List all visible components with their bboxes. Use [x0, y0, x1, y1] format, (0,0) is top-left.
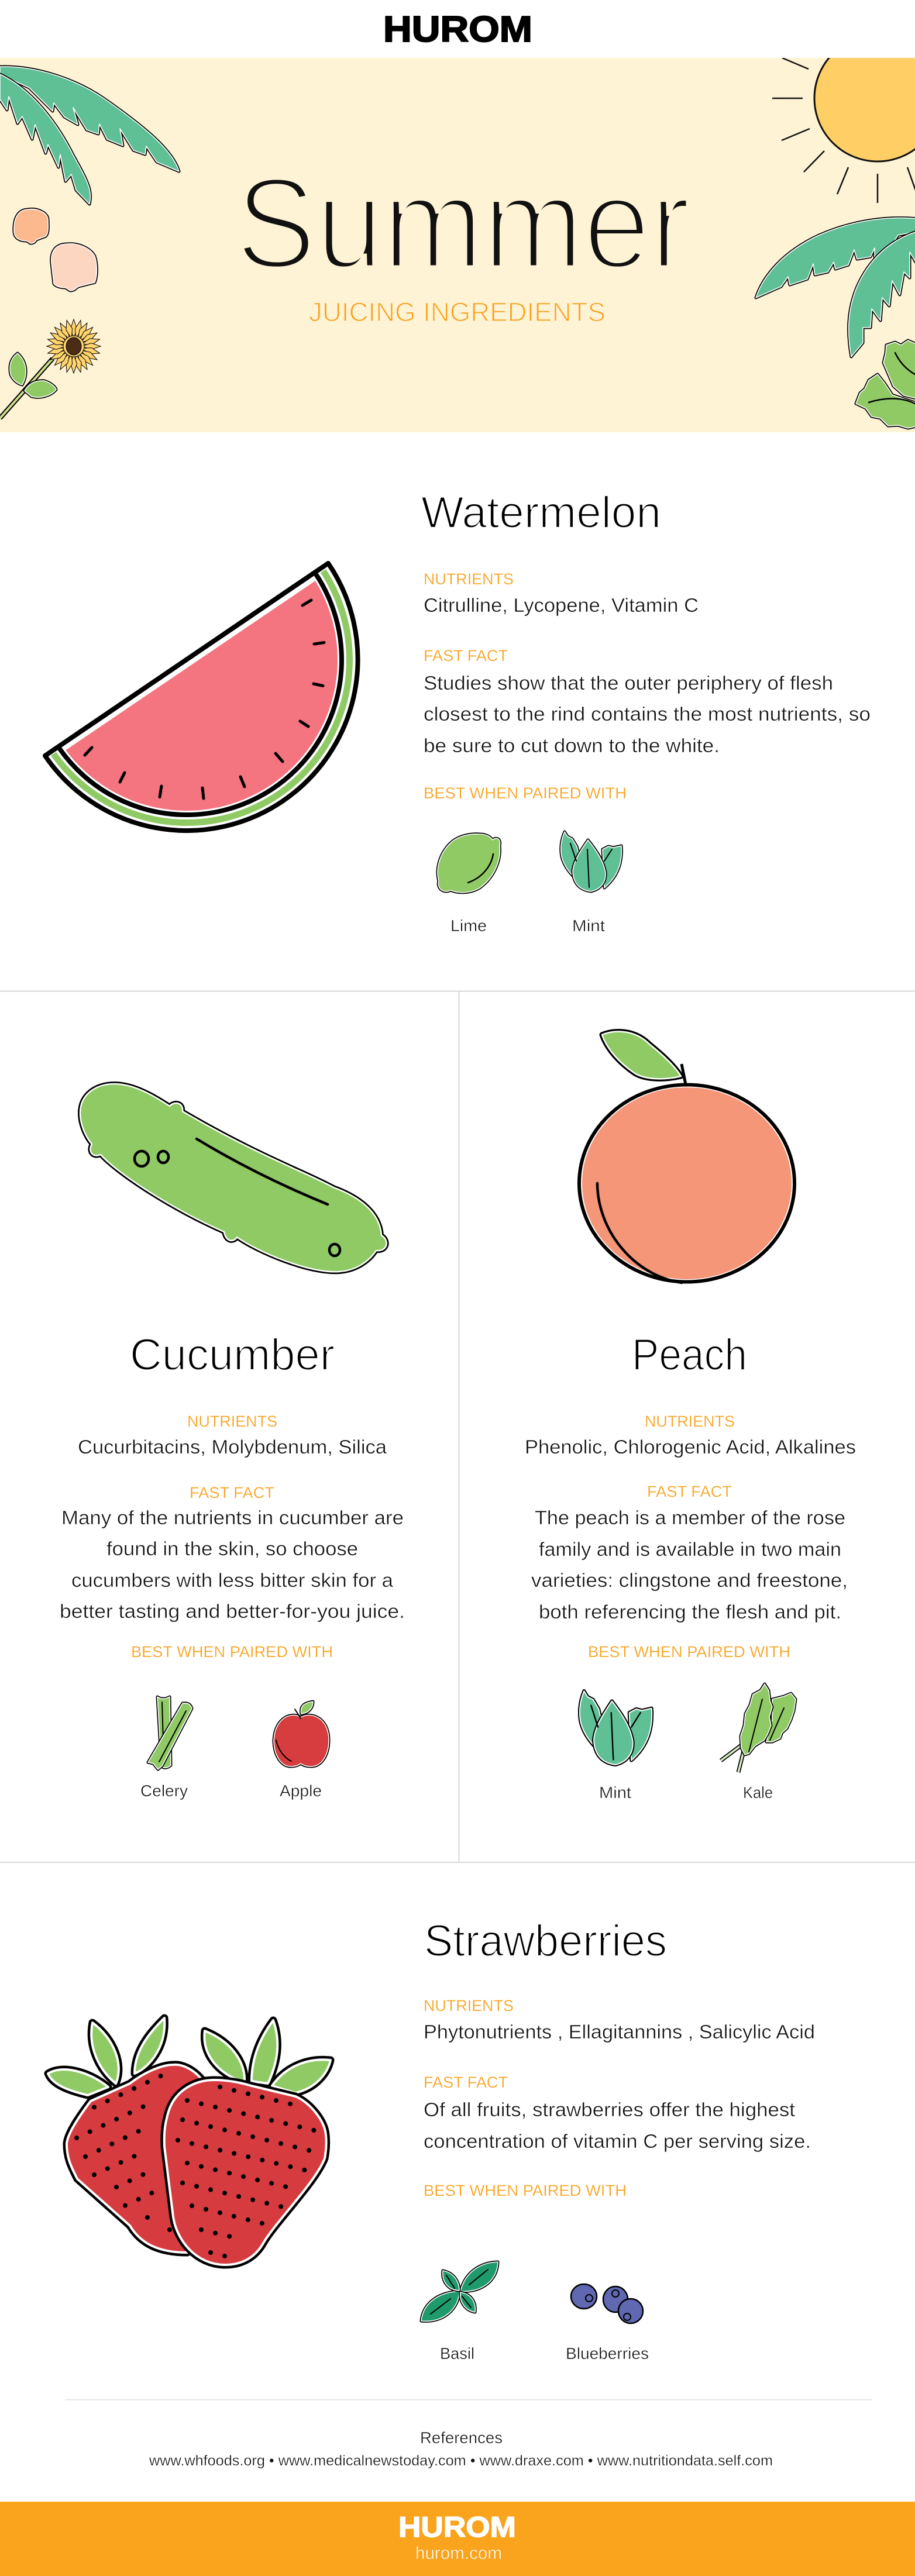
- fast fact text: family and is available in two main: [539, 1538, 841, 1560]
- fast fact text: cucumbers with less bitter skin for a: [71, 1569, 394, 1591]
- fast fact text: [531, 1507, 848, 1623]
- heading: Watermelon: [421, 488, 661, 538]
- icon: mint: [561, 832, 621, 891]
- divider lines: [0, 991, 915, 1862]
- mint label: Mint: [599, 1783, 631, 1802]
- paired label: BEST WHEN PAIRED WITH: [588, 1643, 790, 1661]
- fast fact text: [424, 2099, 811, 2152]
- icon: basil: [421, 2262, 498, 2321]
- fast fact label: FAST FACT: [424, 647, 508, 664]
- icon: apple: [274, 1702, 329, 1766]
- heading: Cucumber: [130, 1330, 335, 1380]
- nutrients text: Phenolic, Chlorogenic Acid, Alkalines: [525, 1436, 856, 1458]
- apple label: Apple: [280, 1782, 322, 1800]
- blueberries label: Blueberries: [566, 2344, 649, 2363]
- fast fact label: FAST FACT: [190, 1484, 274, 1501]
- fast fact text: [424, 672, 871, 756]
- paired label: BEST WHEN PAIRED WITH: [131, 1643, 333, 1661]
- icon: celery: [148, 1697, 192, 1769]
- mint label: Mint: [572, 917, 605, 935]
- icon: strawberries: [48, 2018, 331, 2265]
- nutrients label: NUTRIENTS: [424, 570, 514, 588]
- references: [149, 2429, 773, 2469]
- title: Summer: [236, 151, 690, 296]
- fast fact text: better tasting and better-for-you juice.: [60, 1600, 405, 1622]
- fast fact label: FAST FACT: [424, 2074, 508, 2091]
- icon: kale: [721, 1684, 796, 1772]
- panel: cucumber: [60, 1084, 405, 1800]
- fast fact text: The peach is a member of the rose: [535, 1507, 845, 1528]
- nutrients text: Citrulline, Lycopene, Vitamin C: [424, 594, 699, 616]
- fast fact text: closest to the rind contains the most nutrients, so: [424, 703, 871, 725]
- fast fact text: Of all fruits, strawberries offer the highest: [424, 2099, 795, 2120]
- panel: watermelon: [23, 488, 871, 935]
- references divider: [66, 2399, 872, 2401]
- header logo: HUROM: [383, 9, 532, 50]
- fast fact text: Studies show that the outer periphery of flesh: [424, 672, 833, 694]
- icon: shells: [14, 209, 97, 291]
- panel: peach: [525, 1032, 856, 1802]
- heading: Strawberries: [424, 1916, 667, 1966]
- kale label: Kale: [743, 1783, 773, 1802]
- nutrients text: Phytonutrients , Ellagitannins , Salicylic Acid: [424, 2021, 815, 2043]
- panel: strawberries: [48, 1916, 815, 2363]
- fast fact text: Many of the nutrients in cucumber are: [61, 1507, 404, 1528]
- lime label: Lime: [450, 917, 487, 935]
- fast fact text: varieties: clingstone and freestone,: [531, 1569, 848, 1591]
- panel: summer banner: [0, 35, 915, 432]
- icon: blueberries: [571, 2284, 643, 2323]
- paired label: BEST WHEN PAIRED WITH: [424, 784, 627, 802]
- icon: palm top left: [0, 67, 179, 204]
- celery label: Celery: [140, 1782, 188, 1800]
- heading: Peach: [632, 1330, 747, 1380]
- icon: watermelon: [43, 561, 360, 833]
- paired label: BEST WHEN PAIRED WITH: [424, 2182, 627, 2199]
- references: References: [420, 2429, 503, 2447]
- icon: leaves bottom right: [856, 340, 915, 428]
- references: www.whfoods.org • www.medicalnewstoday.com • www.draxe.com • www.nutritiondata.self.com: [149, 2453, 773, 2469]
- footer url: hurom.com: [415, 2543, 502, 2563]
- icon: lime: [438, 834, 500, 893]
- basil label: Basil: [440, 2344, 474, 2363]
- fast fact label: FAST FACT: [647, 1483, 732, 1500]
- subtitle: JUICING INGREDIENTS: [309, 297, 606, 327]
- icon: sunflower: [0, 319, 101, 418]
- nutrients label: NUTRIENTS: [187, 1413, 277, 1430]
- panel: footer: [0, 2502, 915, 2576]
- nutrients label: NUTRIENTS: [645, 1413, 735, 1430]
- fast fact text: both referencing the flesh and pit.: [539, 1601, 841, 1623]
- nutrients label: NUTRIENTS: [424, 1997, 514, 2014]
- icon: cucumber: [80, 1084, 387, 1272]
- icon: sun: [772, 58, 915, 203]
- icon: mint: [580, 1691, 652, 1765]
- fast fact text: be sure to cut down to the white.: [424, 735, 720, 756]
- nutrients text: Cucurbitacins, Molybdenum, Silica: [78, 1436, 387, 1458]
- footer logo: HUROM: [398, 2512, 516, 2543]
- fast fact text: found in the skin, so choose: [106, 1538, 358, 1559]
- icon: palm right: [756, 218, 915, 357]
- icon: peach: [579, 1032, 794, 1283]
- fast fact text: concentration of vitamin C per serving size.: [424, 2130, 811, 2152]
- fast fact text: [60, 1507, 405, 1622]
